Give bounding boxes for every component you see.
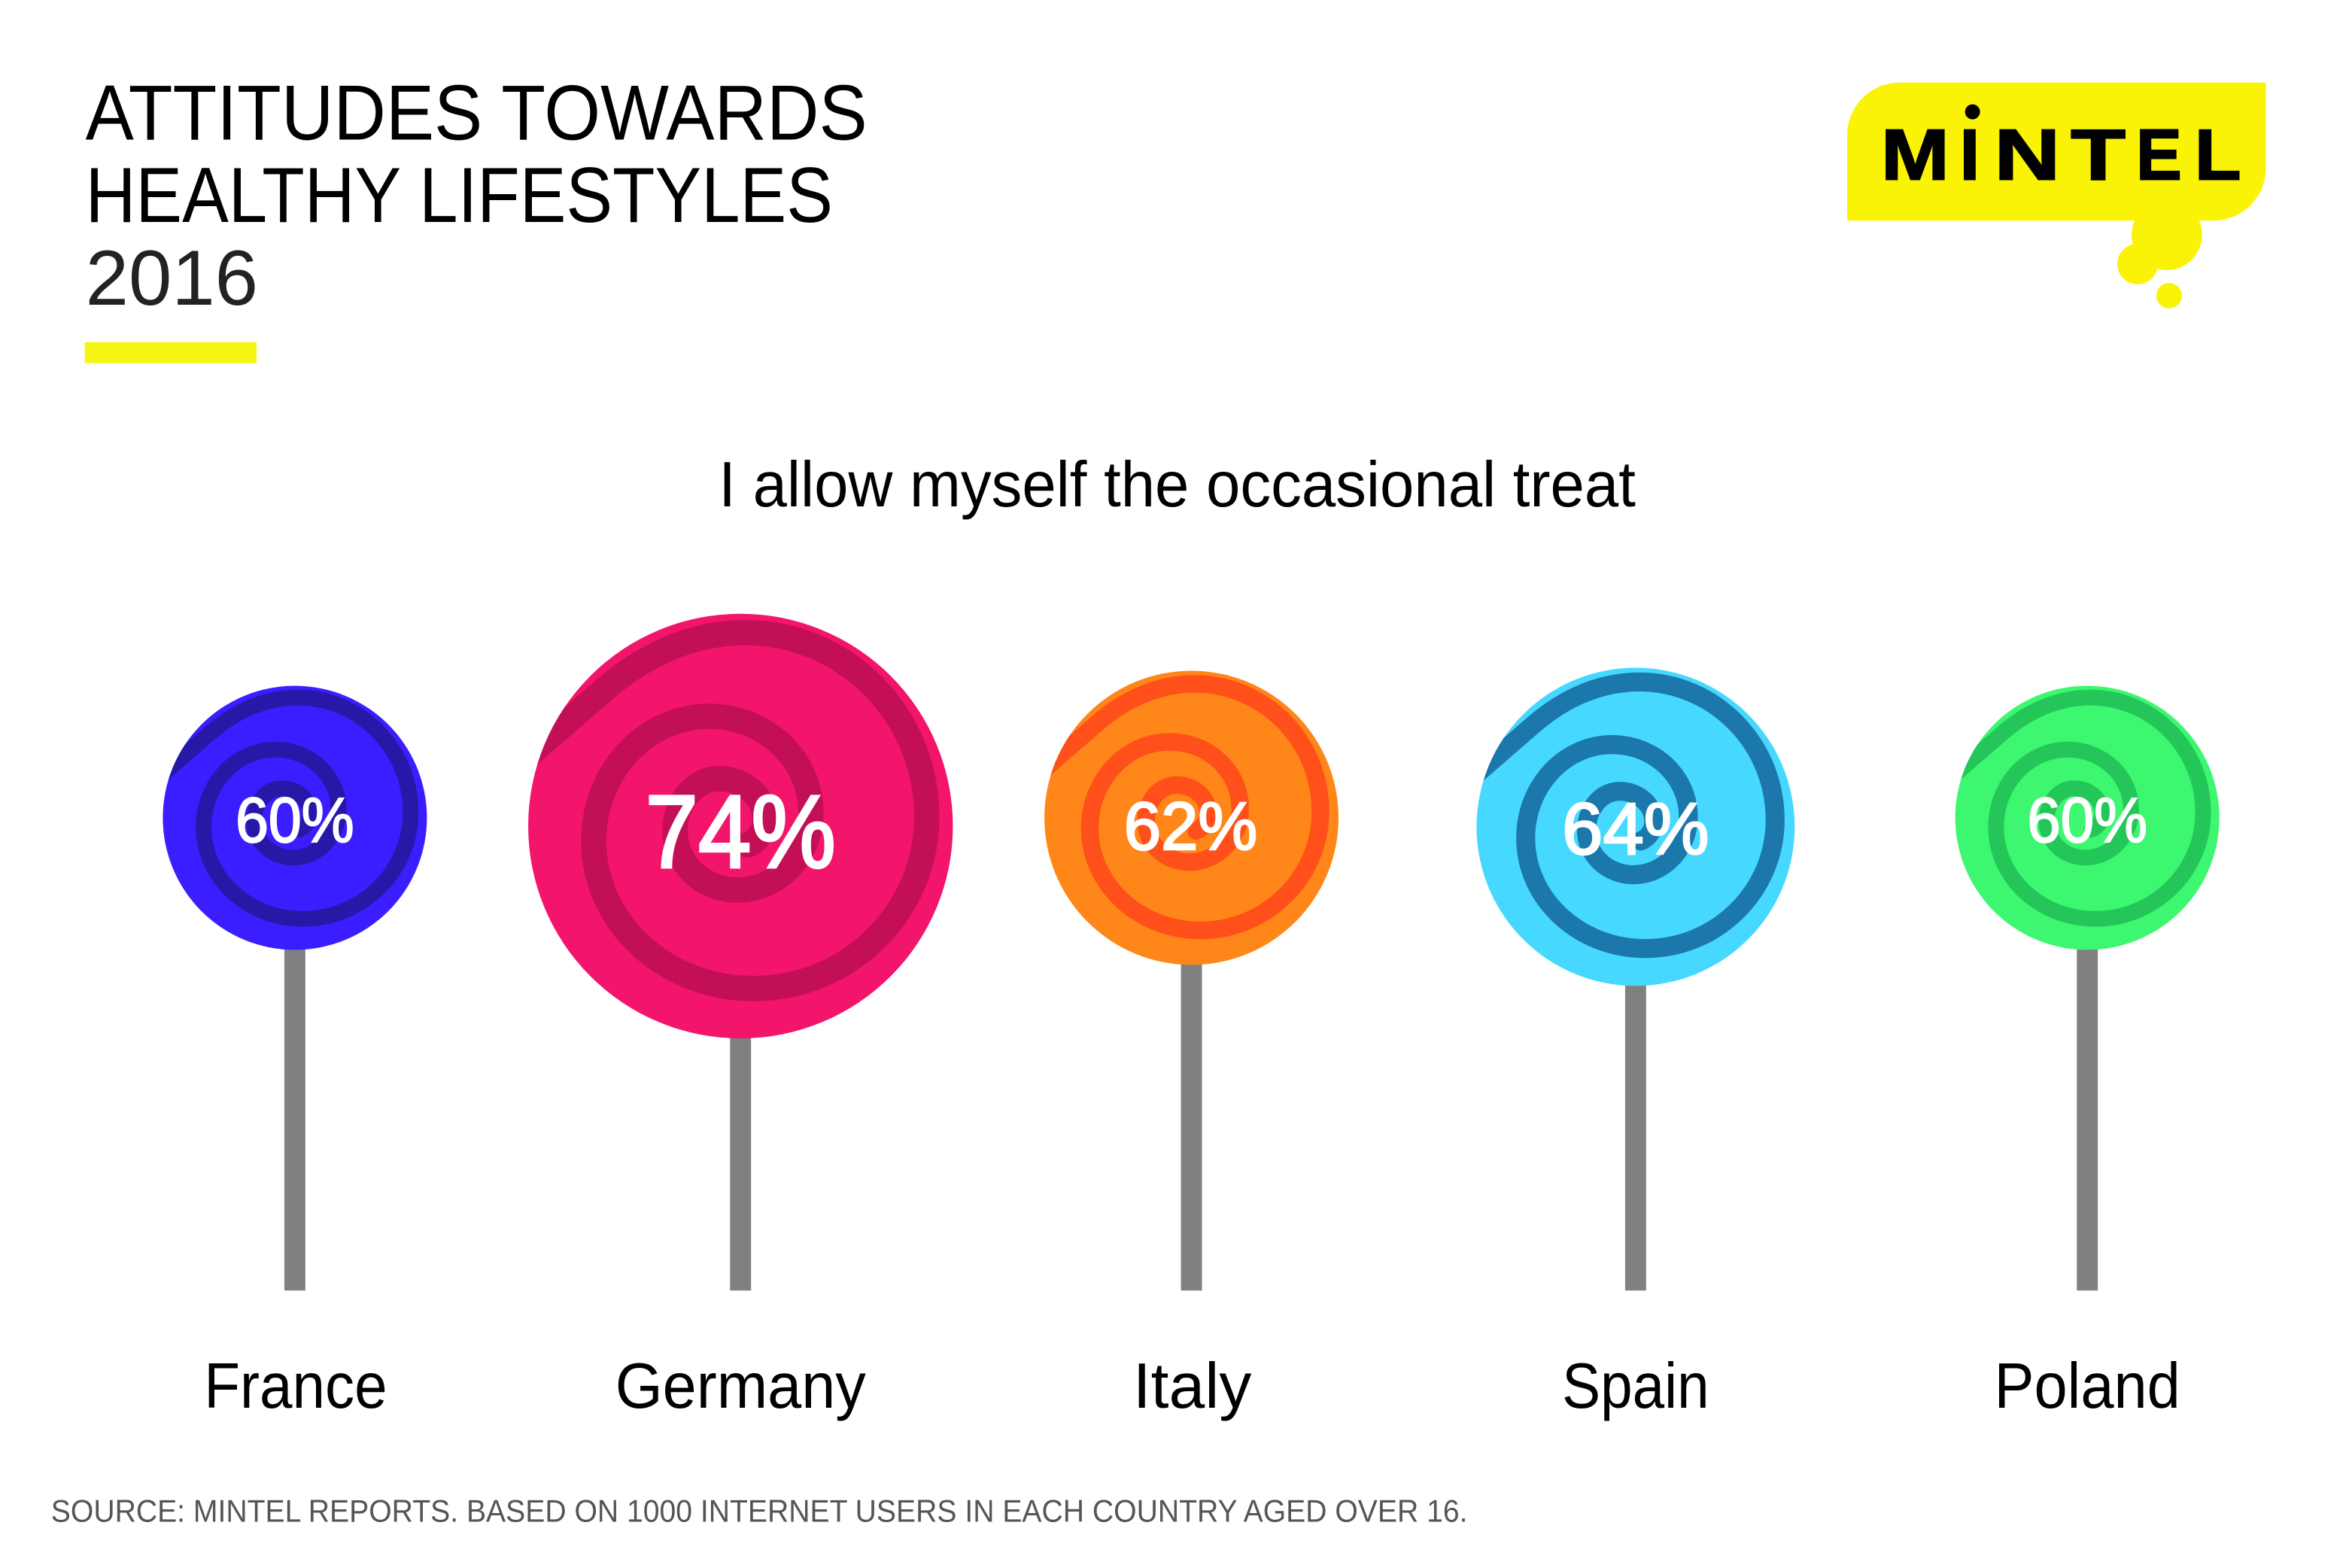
lollipop: France 60% <box>158 685 427 1290</box>
lollipop: Germany 74% <box>520 614 953 1290</box>
country labels: Poland <box>1995 1350 2180 1422</box>
logo: Mintel: L <box>2195 114 2241 195</box>
title accent bar <box>85 342 257 363</box>
lollipop: Spain 64%: 64% <box>1562 788 1709 870</box>
title <box>86 69 868 321</box>
logo: Mintel: E <box>2136 114 2182 195</box>
logo: Mintel: N <box>1995 114 2060 195</box>
logo: Mintel: T <box>2071 114 2126 195</box>
lollipop: Germany 74%: 74% <box>646 774 836 890</box>
title: HEALTHY LIFESTYLES <box>86 151 833 239</box>
lollipop: Poland 60% <box>1950 685 2220 1290</box>
title: ATTITUDES TOWARDS <box>86 69 868 156</box>
lollipop: Spain 64% <box>1470 668 1794 1290</box>
country labels: France <box>204 1350 387 1422</box>
country labels <box>204 1350 2180 1422</box>
lollipop: Italy 62% <box>1039 671 1339 1290</box>
chart heading: I allow myself the occasional treat <box>719 448 1636 521</box>
title: 2016 <box>86 234 258 321</box>
country labels: Germany <box>615 1350 866 1422</box>
source note: SOURCE: MINTEL REPORTS. BASED ON 1000 INTERNET USERS IN EACH COUNTRY AGED OVER 16. <box>51 1493 1468 1528</box>
logo: Mintel: I <box>1960 114 1980 195</box>
country labels: Italy <box>1133 1350 1251 1422</box>
logo: Mintel: M <box>1881 114 1949 195</box>
lollipop: France 60%: 60% <box>236 784 354 855</box>
lollipop: Poland 60%: 60% <box>2027 784 2147 855</box>
country labels: Spain <box>1562 1350 1709 1422</box>
logo: Mintel <box>1847 83 2266 308</box>
lollipop: Italy 62%: 62% <box>1124 789 1257 865</box>
